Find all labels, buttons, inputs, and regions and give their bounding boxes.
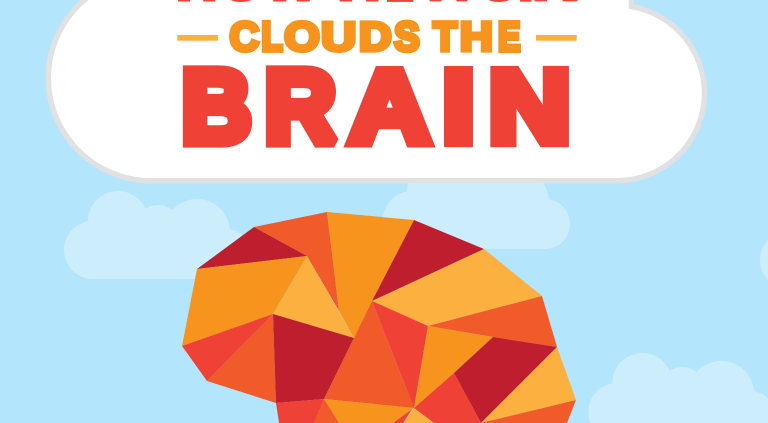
background cloud: centre (383, 161, 570, 249)
title line 3: brain: I (442, 49, 475, 164)
background cloud: lower right (588, 353, 768, 423)
title line 3: brain: N (488, 50, 571, 165)
title line 1: cropped by the top edge (176, 0, 580, 13)
low-poly brain illustration (182, 212, 576, 423)
title cloud (48, 0, 705, 181)
title line 2: clouds the: H (460, 15, 493, 60)
title dash: left (177, 35, 218, 41)
title line 2: clouds the (230, 13, 520, 60)
background cloud: left (64, 191, 251, 279)
title line 3: brain: A (349, 49, 430, 164)
title line 3: brain (182, 49, 571, 165)
title line 2: clouds the: S (394, 14, 420, 60)
title line 3: brain: R (265, 50, 336, 165)
title line 2: clouds the: L (261, 14, 282, 59)
background cloud: right edge (760, 231, 768, 289)
title line 2: clouds the: U (321, 13, 356, 60)
title dash: right (536, 35, 577, 41)
title line 3: brain: B (182, 50, 251, 165)
title line 2: clouds the: O (284, 15, 320, 60)
title line 2: clouds the: E (498, 13, 520, 59)
title line 2: clouds the: D (359, 14, 392, 60)
title line 2: clouds the: C (230, 13, 259, 59)
title line 2: clouds the: T (433, 15, 457, 60)
